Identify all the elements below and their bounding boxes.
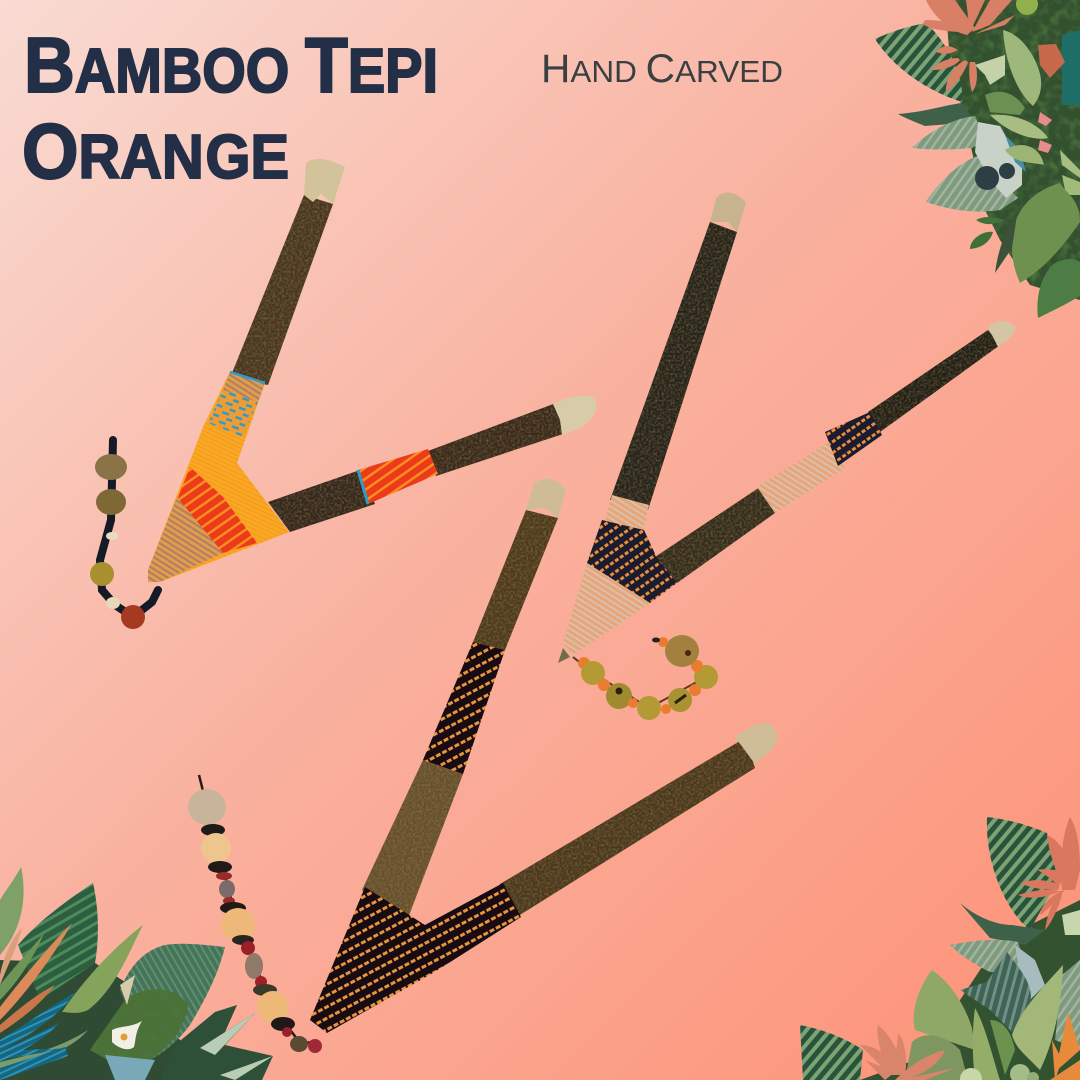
river	[105, 1055, 155, 1080]
feather rays	[0, 993, 75, 1052]
narrow dark leaf	[995, 215, 1017, 273]
light leaf	[0, 867, 24, 955]
slingshot: orange wrap	[90, 159, 596, 629]
waterfall	[1015, 945, 1045, 1000]
subtitle: HAND CARVED	[541, 47, 783, 91]
blue edge	[230, 372, 265, 383]
pale palm fronds	[200, 1013, 255, 1055]
hanging beads	[90, 440, 158, 629]
slingshot: dark wrap with long bark	[188, 479, 777, 1053]
tan stripes	[148, 497, 223, 582]
big green leaf	[1012, 183, 1080, 283]
light leaf 3	[1005, 145, 1044, 165]
coral flower top	[1018, 817, 1080, 930]
pale buds	[120, 975, 135, 1005]
dark base	[0, 960, 230, 1080]
foliage: bottom left corner	[0, 867, 273, 1080]
main dark wrap	[310, 883, 521, 1033]
moss clump	[905, 1035, 968, 1080]
title	[22, 21, 438, 195]
foliage: bottom right corner	[800, 817, 1080, 1080]
title line two: ORANGE	[22, 107, 289, 195]
light leaf	[973, 1008, 1000, 1080]
dark short-arm wrap	[825, 412, 882, 466]
big striped leaf	[120, 944, 225, 1060]
tip caps	[710, 193, 746, 232]
bark short arm	[655, 487, 775, 583]
green fruit	[960, 1068, 982, 1080]
teal striped leaf	[960, 952, 1031, 1032]
dark foliage mass	[945, 0, 1080, 300]
bark short arm	[500, 738, 755, 918]
tip caps	[304, 159, 345, 204]
striped leaf	[875, 23, 962, 102]
waterfall	[975, 122, 1022, 198]
red diamond	[177, 467, 257, 553]
tan cone	[563, 563, 650, 655]
bark long arm	[230, 195, 333, 385]
bottom striped leaf	[800, 1025, 863, 1080]
bark short arm	[268, 470, 375, 532]
tip caps	[526, 479, 566, 518]
round textured leaf	[914, 970, 975, 1050]
title line one: BAMBOO TEPI	[24, 21, 438, 109]
pale leaf cluster	[975, 55, 1005, 85]
veined lower leaf	[926, 156, 1018, 212]
teal panel	[1062, 30, 1080, 105]
right pale leaves	[1060, 150, 1080, 178]
dark patterned wrap	[587, 520, 677, 603]
rocks	[975, 166, 999, 190]
tan short-arm wrap	[757, 440, 845, 513]
coral flower	[923, 0, 1015, 92]
pink blossoms	[1038, 112, 1052, 126]
grey-green leaf	[912, 116, 985, 150]
palm base	[160, 1005, 273, 1080]
dark pointed leaf	[898, 103, 975, 126]
bottom leaf	[1037, 259, 1080, 318]
grey-green leaf	[950, 940, 1028, 975]
bark long arm	[610, 222, 737, 510]
slingshot: black and tan wrap	[558, 193, 1016, 720]
white flower	[112, 1021, 142, 1049]
pale blossom	[1062, 910, 1080, 935]
right striped leaf	[1055, 960, 1080, 1050]
striped dark leaf	[18, 883, 98, 1000]
light leaf 2	[990, 115, 1048, 139]
bark long arm lower	[362, 760, 463, 918]
fruit and red blossom	[1016, 0, 1038, 15]
coral flower bottom	[860, 1025, 955, 1080]
light long leaf	[1012, 965, 1063, 1070]
orange feathers	[0, 923, 72, 1020]
hanging beads	[573, 635, 718, 720]
tan stripes top	[223, 372, 265, 402]
moss patch	[985, 92, 1025, 115]
moss	[90, 989, 188, 1070]
small dark leaves	[970, 232, 993, 249]
orange wrap body	[148, 372, 289, 582]
light long leaf	[1003, 30, 1041, 106]
foliage: top right corner	[875, 0, 1080, 318]
striped leaf	[987, 817, 1058, 930]
dark foliage mass	[860, 900, 1080, 1080]
red short-arm wrap	[358, 449, 438, 504]
grey tip	[558, 648, 570, 663]
dark pointed leaf	[960, 903, 1045, 945]
green feathers	[0, 933, 44, 1000]
hanging beads	[188, 775, 322, 1053]
light leaf	[62, 925, 143, 1013]
blue patterned band	[208, 390, 258, 437]
bark long arm upper	[473, 510, 558, 650]
mid dark band	[423, 642, 505, 774]
tan top band	[604, 495, 649, 535]
orange strelitzia	[1052, 1012, 1080, 1080]
